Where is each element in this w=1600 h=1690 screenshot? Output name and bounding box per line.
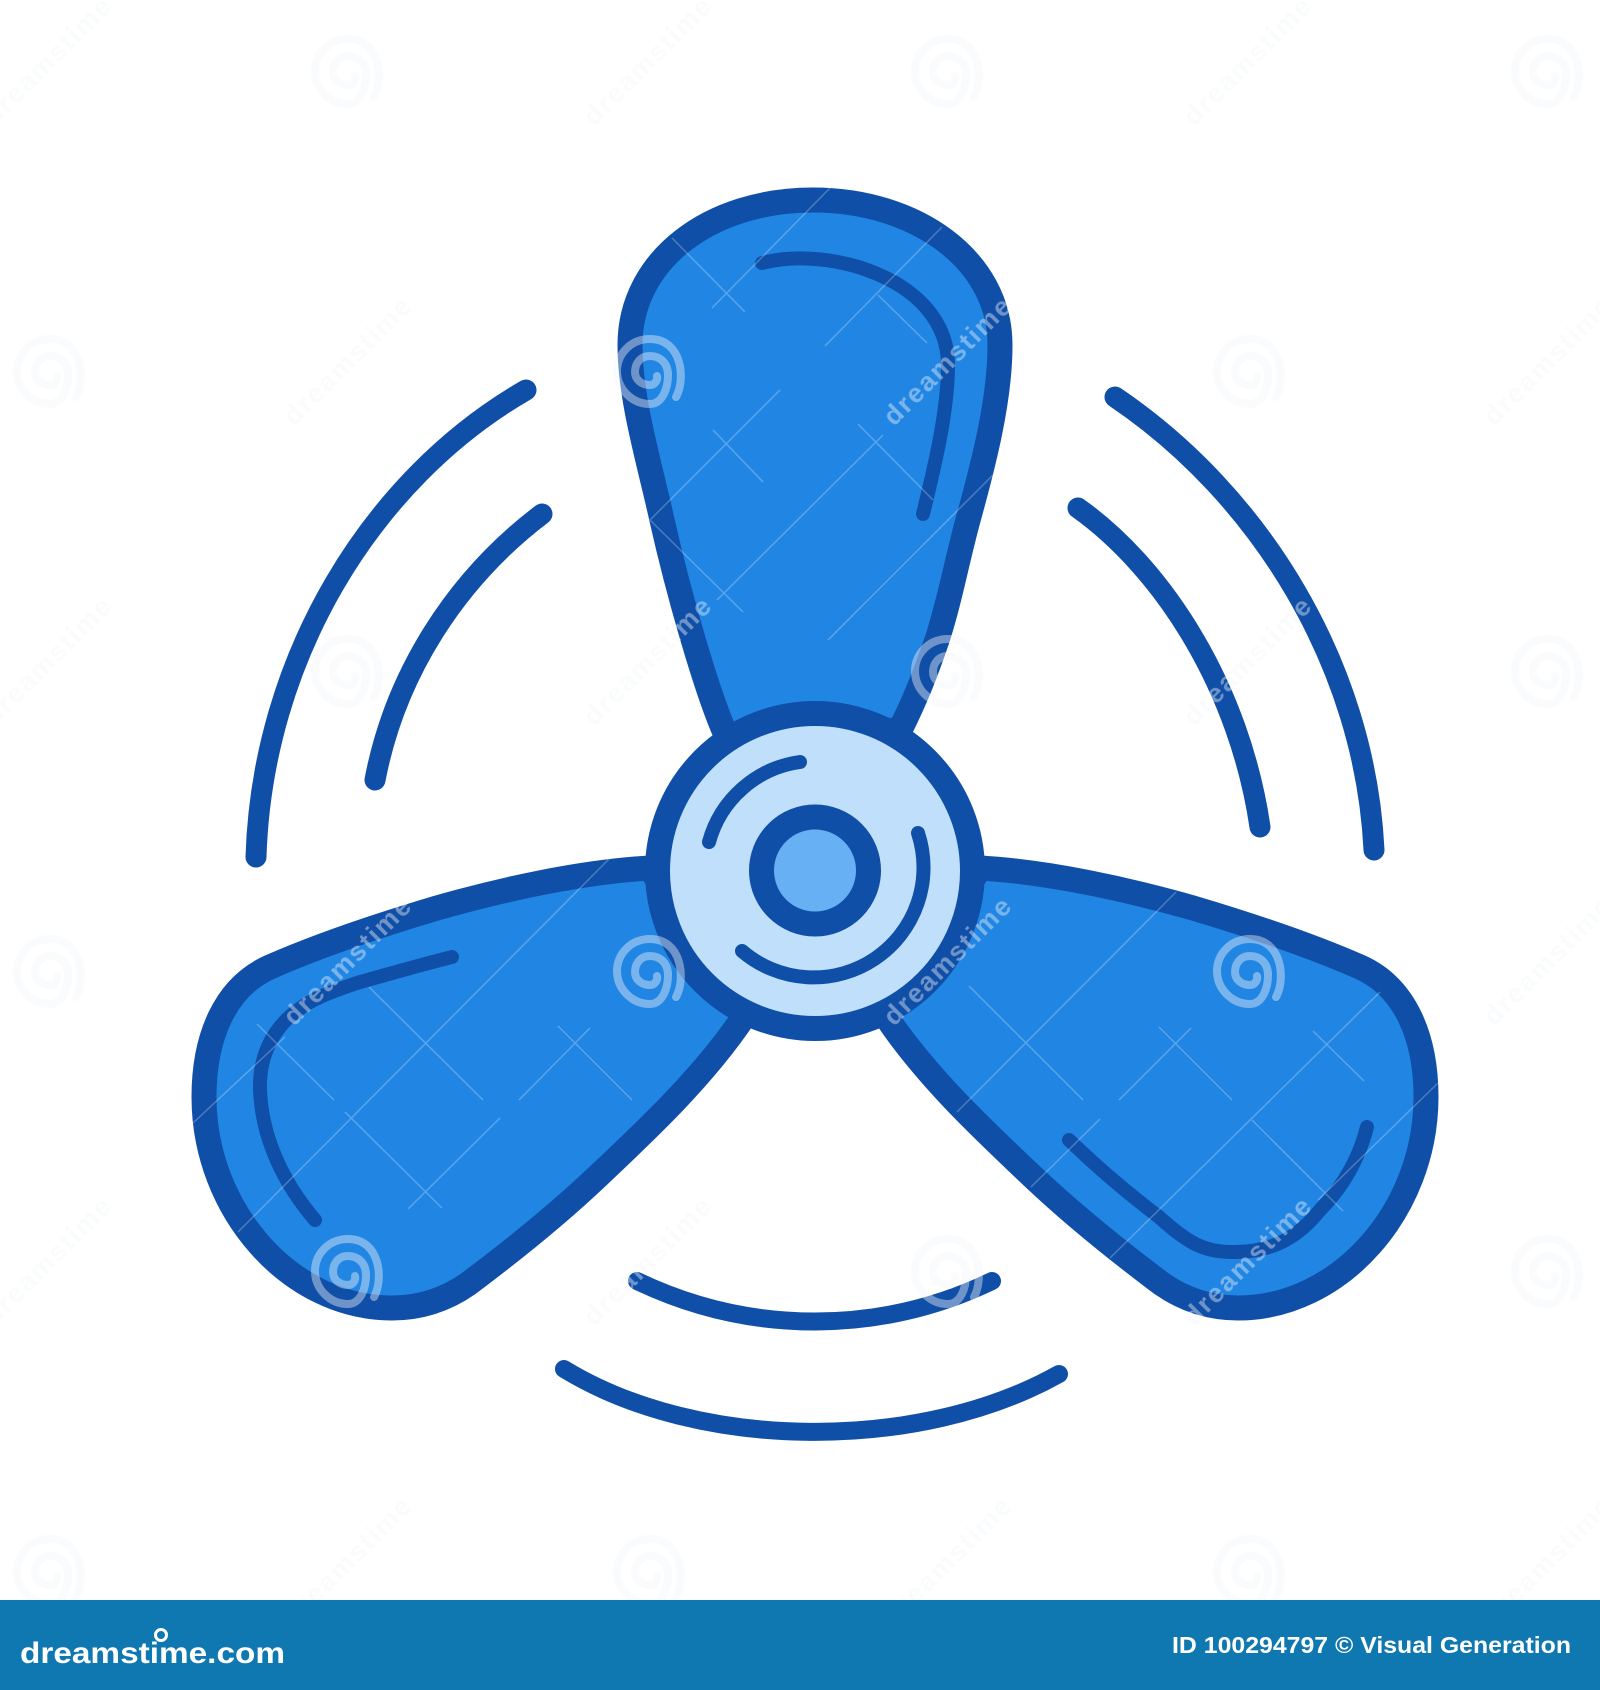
hub [658,714,972,1028]
watermark text: dreamstime [577,1191,717,1331]
watermark text: dreamstime [1177,591,1317,731]
blade: left [204,868,745,1308]
footer credit: ID 100294797 © Visual Generation [1172,1632,1571,1658]
footer bar [0,1600,1600,1690]
motion arcs: upper right [1078,397,1374,850]
watermark text: dreamstime [877,891,1017,1031]
watermark text: dreamstime [877,1491,1017,1631]
motion arcs: upper left [256,390,542,857]
watermark hairlines [193,188,1438,1258]
motion arcs: bottom [564,1281,1059,1432]
icon: propeller [204,200,1426,1432]
blade: top [630,200,1000,735]
watermark text: dreamstime [277,1491,417,1631]
watermark text: dreamstime [577,591,717,731]
watermark text: dreamstime [277,291,417,431]
watermark text: dreamstime [877,291,1017,431]
watermark text: dreamstime [1177,1191,1317,1331]
watermark text: dreamstime [277,891,417,1031]
footer logo: dreamstime.com [20,1637,285,1670]
blade: right [885,868,1426,1308]
